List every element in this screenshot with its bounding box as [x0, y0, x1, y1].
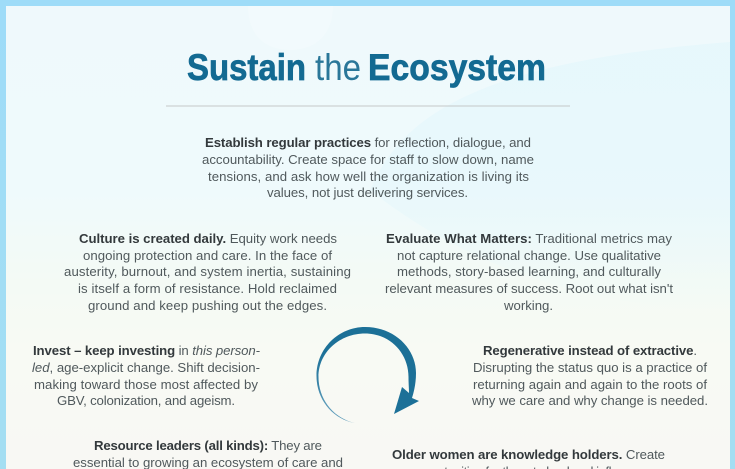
text block: establish regular practices: tensions, and ask how well the organization is living its — [208, 169, 529, 184]
text block: invest: making toward those most affected by — [34, 377, 258, 392]
text block: older women: Older women are knowledge holders. Create — [392, 447, 665, 462]
text block: culture is created daily: ground and keep pushing out the edges. — [88, 298, 327, 313]
title: Ecosystem — [368, 47, 546, 88]
title: Sustain — [187, 47, 306, 88]
text block: culture is created daily: is itself a form of resistance. Hold reclaimed — [78, 281, 337, 296]
text block: evaluate what matters: Evaluate What Matters: Traditional metrics may — [386, 231, 672, 246]
text block: older women — [392, 447, 665, 469]
divider — [166, 106, 570, 107]
text block: regenerative: Regenerative instead of extractive. — [483, 343, 697, 358]
text block: evaluate what matters: working. — [503, 298, 553, 313]
text block: evaluate what matters: not capture relational change. Use qualitative — [397, 248, 661, 263]
text block: resource leaders — [73, 438, 343, 469]
title: the — [315, 47, 361, 88]
text block: evaluate what matters — [385, 231, 673, 313]
title — [187, 47, 546, 88]
text block: establish regular practices: values, not just delivering services. — [267, 185, 468, 200]
text block: establish regular practices: accountability. Create space for staff to slow down, name — [202, 152, 534, 167]
text block: invest: GBV, colonization, and ageism. — [57, 393, 235, 408]
text block: evaluate what matters: methods, story-based learning, and culturally — [397, 264, 661, 279]
text block: invest — [32, 343, 261, 408]
text block: regenerative: why we care and why change is needed. — [471, 393, 708, 408]
text block: establish regular practices: Establish regular practices for reflection, dialogue, and — [205, 135, 531, 150]
text block: regenerative: returning again and again to the roots of — [473, 377, 707, 392]
text block: establish regular practices — [202, 135, 534, 200]
text block: resource leaders: Resource leaders (all kinds): They are — [94, 438, 322, 453]
text block: culture is created daily: austerity, burnout, and system inertia, sustaining — [64, 264, 351, 279]
circular arrow — [316, 327, 419, 423]
text block: regenerative — [471, 343, 708, 408]
text block: culture is created daily — [64, 231, 351, 313]
text block: invest: led, age-explicit change. Shift decision- — [32, 360, 260, 375]
text block: culture is created daily: ongoing protection and care. In the face of — [83, 248, 332, 263]
text block: culture is created daily: Culture is created daily. Equity work needs — [79, 231, 337, 246]
text block: regenerative: Disrupting the status quo is a practice of — [473, 360, 707, 375]
text block: invest: Invest – keep investing in this person- — [33, 343, 261, 358]
text block: evaluate what matters: relevant measures of success. Root out what isn't — [385, 281, 673, 296]
